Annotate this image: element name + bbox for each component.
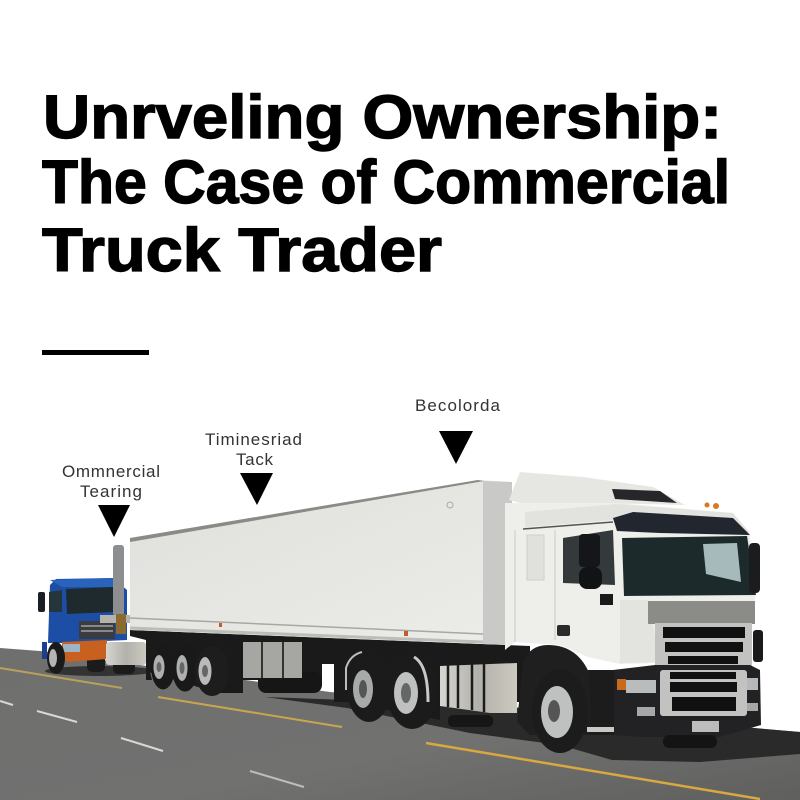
front bumper xyxy=(613,665,761,737)
right mirror xyxy=(749,543,760,593)
lower grille xyxy=(660,670,747,716)
windshield xyxy=(622,536,756,596)
grille panel xyxy=(648,601,755,624)
battery boxes xyxy=(243,642,302,678)
trailer chassis and wheels xyxy=(130,630,530,729)
front under wheel xyxy=(663,735,717,748)
tandem axle wheels xyxy=(346,652,437,729)
fog lights and plate xyxy=(637,703,758,732)
amber roof lights xyxy=(704,502,719,509)
sun visor xyxy=(613,512,750,535)
front wheel xyxy=(532,669,588,753)
label: Commercial Tearing xyxy=(62,462,160,537)
triple axle wheels xyxy=(151,644,229,696)
blue truck xyxy=(38,545,155,676)
label: Commercial Tearing: Tearing xyxy=(80,482,142,501)
sleeper door lines xyxy=(515,530,555,642)
label: Timinesriad Tack: Timinesriad xyxy=(205,430,302,449)
title underline rule xyxy=(42,350,149,355)
side mirrors xyxy=(579,534,613,605)
title xyxy=(42,83,730,284)
label: Timinesriad Tack: Tack xyxy=(236,450,274,469)
roof fairing xyxy=(509,472,685,505)
cab body xyxy=(505,503,755,664)
upper grille xyxy=(655,623,752,666)
label: Becolorda xyxy=(415,396,501,464)
side window xyxy=(563,530,615,585)
white cab truck xyxy=(505,472,763,753)
front wheel arch xyxy=(517,645,590,735)
headlights xyxy=(617,678,758,693)
cab step xyxy=(588,670,614,735)
trailer box xyxy=(130,480,512,645)
label: Timinesriad Tack xyxy=(205,430,302,505)
title: Unrveling Ownership: xyxy=(43,83,722,151)
side vent xyxy=(527,535,544,580)
title: The Case of Commercial xyxy=(42,148,730,216)
fuel tank xyxy=(440,663,517,727)
label: Becolorda: Becolorda xyxy=(415,396,501,415)
title: Truck Trader xyxy=(42,216,442,284)
door handle xyxy=(557,625,570,636)
label: Commercial Tearing: Ommnercial xyxy=(62,462,160,481)
road xyxy=(0,648,800,800)
